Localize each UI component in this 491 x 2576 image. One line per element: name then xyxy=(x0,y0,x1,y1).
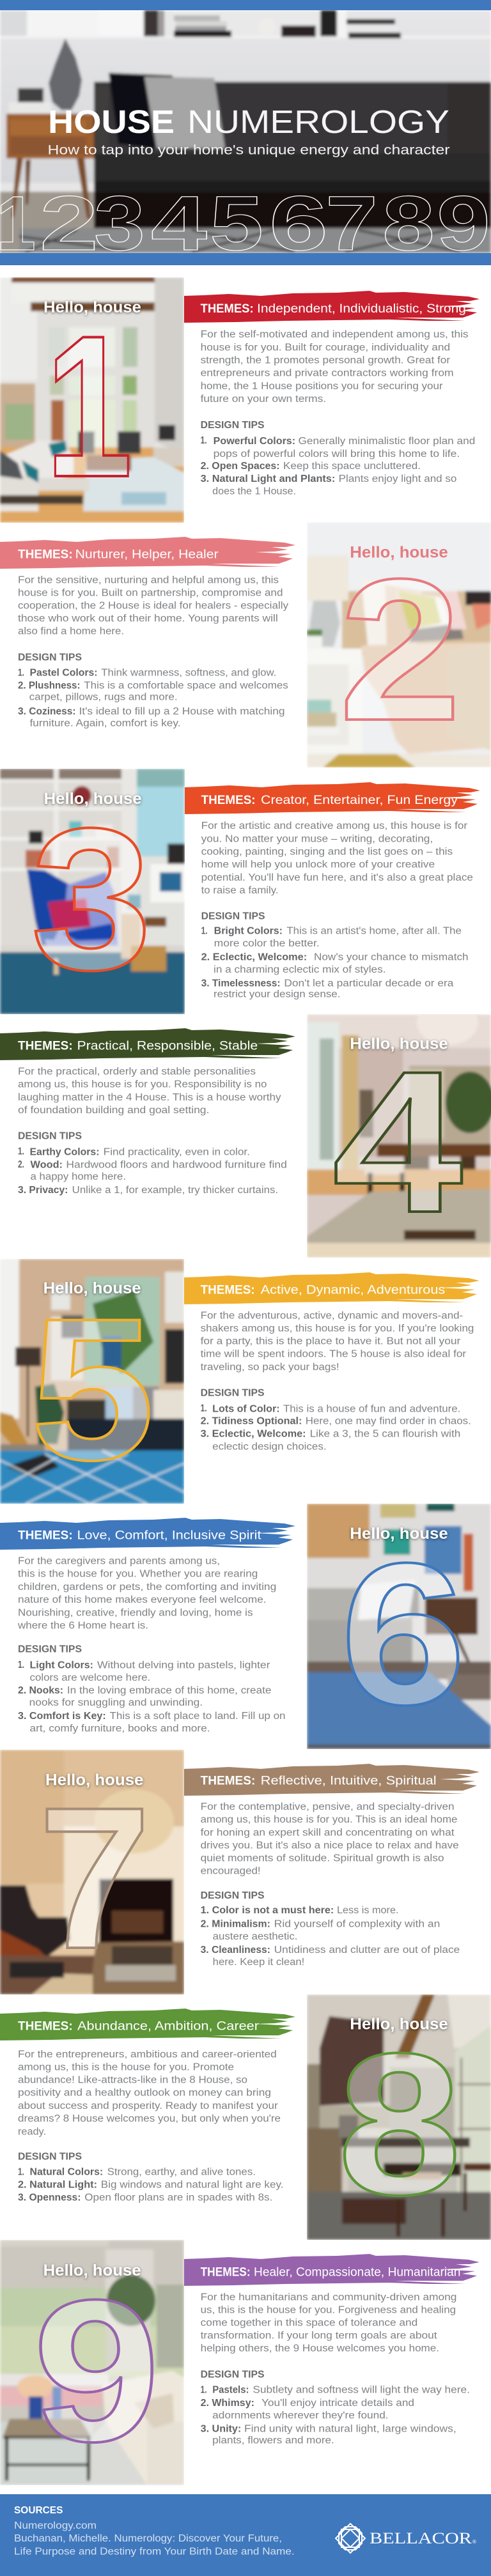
hello heading: Hello, house xyxy=(350,2015,448,2033)
sources text: Numerology.com xyxy=(14,2520,97,2531)
sources text: Life Purpose and Destiny from Your Birth Date and Name. xyxy=(14,2547,295,2557)
design tips: a happy home here. xyxy=(31,1171,126,1182)
design tips: Don't let a particular decade or era xyxy=(284,978,454,989)
design tips: Powerful Colors: xyxy=(214,436,295,447)
description text: you. No matter your muse – writing, decorating, xyxy=(201,833,433,844)
photo: pastel bedroom xyxy=(307,522,491,767)
themes banner: Reflective, Intuitive, Spiritual xyxy=(261,1775,437,1788)
hello heading: Hello, house xyxy=(44,790,142,808)
design tips: Find unity with natural light, large windows, xyxy=(244,2423,456,2434)
design tips: Generally minimalistic floor plan and xyxy=(298,436,475,447)
themes banner xyxy=(0,537,295,569)
themes banner: Nurturer, Helper, Healer xyxy=(75,548,219,561)
themes banner: THEMES: xyxy=(201,302,254,316)
description text: traveling, so pack your bags! xyxy=(201,1362,339,1373)
themes banner xyxy=(184,2254,479,2286)
design tips xyxy=(201,1388,471,1452)
design tips: This is a house of fun and adventure. xyxy=(283,1403,460,1414)
design tips: This is a soft place to land. Fill up on xyxy=(110,1711,285,1722)
description text: where the 6 Home heart is. xyxy=(17,1620,148,1631)
design tips: 1. xyxy=(201,1403,207,1414)
design tips xyxy=(18,1644,285,1734)
photo: dining room xyxy=(307,1000,491,1258)
design tips: 2. Whimsy: xyxy=(201,2398,254,2409)
design tips: Without delving into pastels, lighter xyxy=(97,1660,270,1671)
photo: brick loft xyxy=(0,1259,184,1504)
panel: house 2 xyxy=(0,522,491,767)
description text xyxy=(201,1310,474,1373)
themes banner xyxy=(184,1764,479,1796)
hero outlined digits 1 to 9: 6 xyxy=(269,180,328,266)
design tips: 1. xyxy=(18,1660,24,1670)
themes banner: THEMES: xyxy=(18,1529,73,1543)
design tips: nooks for snuggling and unwinding. xyxy=(29,1697,203,1708)
themes banner xyxy=(0,1518,295,1550)
design tips: Plants enjoy light and so xyxy=(339,474,456,484)
design tips: 2. Natural Light: xyxy=(18,2180,97,2191)
themes banner xyxy=(0,2009,295,2040)
design tips: 2. Tidiness Optional: xyxy=(201,1416,302,1427)
themes banner xyxy=(184,1272,479,1304)
description text: cooking, painting, singing and the list goes on – this xyxy=(201,847,453,858)
design tips: 1. xyxy=(18,667,24,678)
description text: for a party, this is the place to have it. But not all your xyxy=(201,1336,460,1347)
design tips: 3. Eclectic, Welcome: xyxy=(201,1429,306,1440)
design tips: DESIGN TIPS xyxy=(201,420,265,431)
design tips: Bright Colors: xyxy=(214,926,283,937)
design tips: Less is more. xyxy=(337,1905,399,1916)
panel: house 9 xyxy=(0,2240,479,2485)
themes banner: THEMES: xyxy=(201,1775,255,1788)
description text: For the artistic and creative among us, this house is for xyxy=(201,821,467,831)
design tips: Rid yourself of complexity with an xyxy=(274,1919,440,1930)
description text: encouraged! xyxy=(201,1866,261,1877)
design tips: Unlike a 1, for example, try thicker curtains. xyxy=(72,1185,278,1196)
numeral 4: 4 xyxy=(332,1029,464,1254)
photo: fireplace room xyxy=(0,1750,184,1994)
design tips: Strong, earthy, and alive tones. xyxy=(107,2166,256,2177)
description text: those who work out of their home. Young parents will xyxy=(18,613,278,624)
hero outlined digits 1 to 9 xyxy=(0,180,490,266)
design tips: DESIGN TIPS xyxy=(18,2151,82,2162)
description text: about success and prosperity. Ready to manifest your xyxy=(18,2101,278,2111)
hero photo: living room xyxy=(0,10,491,253)
design tips: austere aesthetic. xyxy=(213,1931,298,1942)
design tips: Big windows and natural light are key. xyxy=(101,2180,284,2191)
design tips: Wood: xyxy=(31,1160,63,1171)
numeral 3: 3 xyxy=(31,786,152,1012)
design tips: Pastels: xyxy=(212,2385,249,2396)
design tips xyxy=(201,420,475,497)
design tips: colors are welcome here. xyxy=(29,1672,150,1683)
hero outlined digits 1 to 9: 5 xyxy=(210,180,263,266)
design tips: You'll enjoy intricate details and xyxy=(261,2398,414,2409)
blue band under hero xyxy=(0,253,491,265)
design tips: It's ideal to fill up a 2 House with matching xyxy=(79,706,284,717)
numeral 7: 7 xyxy=(38,1765,151,1991)
design tips: art, comfy furniture, books and more. xyxy=(29,1723,210,1734)
description text: this is the house for you. Whether you are rearing xyxy=(18,1569,258,1580)
themes banner: THEMES: xyxy=(201,794,256,807)
design tips: 3. Coziness: xyxy=(18,706,76,717)
design tips xyxy=(201,911,469,1000)
design tips: carpet, pillows, rugs and more. xyxy=(29,691,178,702)
description text: home will help you unlock more of your creative xyxy=(201,860,435,870)
Bellacor logo: ® xyxy=(472,2539,476,2545)
themes banner: Love, Comfort, Inclusive Spirit xyxy=(77,1529,261,1543)
numeral 1: 1 xyxy=(45,293,132,519)
design tips: Subtlety and softness will light the way here. xyxy=(253,2385,470,2396)
description text: to raise a family. xyxy=(201,885,279,896)
description text: house is for you. Built on partnership, compromise and xyxy=(18,587,283,598)
numeral 2: 2 xyxy=(339,537,462,762)
description text: Nourishing, creative, friendly and loving, home is xyxy=(18,1607,253,1618)
hello heading: Hello, house xyxy=(43,1279,141,1297)
description text: abundance! Like-attracts-like in the 8 House, so xyxy=(18,2075,247,2086)
photo: sunroom xyxy=(0,2240,184,2485)
themes banner: Independent, Individualistic, Strong xyxy=(257,302,466,316)
hero subtitle: How to tap into your home's unique energy and character xyxy=(47,143,450,157)
hero outlined digits 1 to 9: 4 xyxy=(151,180,207,266)
hero panel xyxy=(0,10,491,266)
hello heading: Hello, house xyxy=(43,298,141,316)
description text: of foundation building and goal setting. xyxy=(18,1105,209,1116)
description text xyxy=(201,1801,459,1877)
description text: future on your own terms. xyxy=(201,394,326,405)
panel: house 8 xyxy=(0,1994,491,2240)
hello heading: Hello, house xyxy=(350,1035,448,1053)
design tips: does the 1 House. xyxy=(212,486,296,497)
description text: children, gardens or pets, the comforting and inviting xyxy=(18,1582,276,1593)
description text: among us, this house is for you. This is an ideal home xyxy=(201,1814,457,1825)
design tips: Untidiness and clutter are out of place xyxy=(274,1945,460,1955)
design tips: Keep this space uncluttered. xyxy=(283,461,421,472)
design tips: In the loving embrace of this home, create xyxy=(67,1685,271,1696)
numeral 6: 6 xyxy=(340,1521,466,1747)
description text: transformation. If your long term goals are about xyxy=(201,2330,437,2341)
description text: helping others, the 9 House welcomes you home. xyxy=(201,2343,439,2354)
design tips: 1. xyxy=(201,2385,207,2396)
sources text: SOURCES xyxy=(14,2505,63,2516)
design tips: Natural Colors: xyxy=(29,2166,103,2177)
hello heading: Hello, house xyxy=(350,544,448,562)
design tips: furniture. Again, comfort is key. xyxy=(29,718,180,729)
design tips: DESIGN TIPS xyxy=(18,652,82,663)
themes banner: THEMES: xyxy=(18,2020,73,2033)
design tips: 2. Plushness: xyxy=(18,681,81,691)
description text: For the contemplative, pensive, and specialty-driven xyxy=(201,1801,455,1812)
description text: house is for you. Built for courage, individuality and xyxy=(201,342,450,353)
design tips: Now's your chance to mismatch xyxy=(314,952,469,963)
numeral 5: 5 xyxy=(30,1276,155,1502)
hero title xyxy=(48,104,449,140)
design tips xyxy=(18,652,288,729)
design tips: Pastel Colors: xyxy=(29,667,97,678)
description text: dreams? 8 House welcomes you, but only when you're xyxy=(18,2113,281,2124)
numeral 8: 8 xyxy=(338,2011,462,2237)
description text: also find a home here. xyxy=(18,626,124,637)
description text xyxy=(201,2292,456,2354)
description text: nature of this home makes everyone feel welcome. xyxy=(18,1594,267,1605)
description text: For the humanitarians and community-driven among xyxy=(201,2292,456,2303)
hero outlined digits 1 to 9: 8 xyxy=(382,180,435,266)
design tips: 2. Open Spaces: xyxy=(201,461,280,472)
hero title: HOUSE xyxy=(48,104,175,140)
description text: among us, this house is for you. Responsibility is no xyxy=(18,1079,267,1090)
themes banner xyxy=(184,291,479,323)
description text: come together in this space of tolerance and xyxy=(201,2317,417,2329)
hero title: NUMEROLOGY xyxy=(187,104,449,140)
design tips: 1. xyxy=(18,2166,24,2177)
description text: For the adventurous, active, dynamic and movers-and- xyxy=(201,1310,463,1321)
design tips: 3. Openness: xyxy=(18,2193,81,2203)
themes banner xyxy=(185,782,480,814)
design tips: Open floor plans are in spades with 8s. xyxy=(84,2193,272,2203)
description text: for honing an expert skill and concentrating on what xyxy=(201,1827,455,1838)
description text xyxy=(18,2049,281,2137)
description text: time will be spent indoors. The 5 house is also ideal for xyxy=(201,1349,466,1360)
themes banner: THEMES: xyxy=(201,1283,255,1297)
design tips: Lots of Color: xyxy=(212,1403,280,1414)
description text: shakers among us, this house is for you. If you're looking xyxy=(201,1323,474,1334)
design tips: 3. Comfort is Key: xyxy=(18,1711,106,1722)
design tips: DESIGN TIPS xyxy=(201,1388,265,1399)
design tips xyxy=(201,2370,470,2446)
themes banner: THEMES: xyxy=(18,1040,73,1053)
hero outlined digits 1 to 9: 7 xyxy=(325,180,378,266)
footer panel xyxy=(0,2494,491,2576)
design tips: plants, flowers and more. xyxy=(212,2435,334,2446)
design tips: 3. Unity: xyxy=(201,2423,241,2434)
design tips xyxy=(201,1890,460,1968)
design tips: pops of powerful colors will bring this home to life. xyxy=(214,449,460,459)
design tips: Find practicality, even in color. xyxy=(104,1146,250,1157)
themes banner: Practical, Responsible, Stable xyxy=(77,1040,258,1053)
themes banner: Creator, Entertainer, Fun Energy xyxy=(261,794,458,807)
design tips: in a charming eclectic mix of styles. xyxy=(214,964,386,975)
design tips: Light Colors: xyxy=(29,1660,93,1671)
Bellacor logo: BELLACOR xyxy=(370,2530,472,2547)
design tips: restrict your design sense. xyxy=(214,989,340,1000)
hero outlined digits 1 to 9: 3 xyxy=(94,180,145,266)
design tips: Think warmness, softness, and glow. xyxy=(101,667,276,678)
design tips: 2. Nooks: xyxy=(18,1685,63,1696)
design tips: here. Keep it clean! xyxy=(213,1957,304,1968)
panel: house 7 xyxy=(0,1750,479,1994)
design tips: 3. Natural Light and Plants: xyxy=(201,474,335,484)
photo: living room with blue rug xyxy=(307,1504,491,1749)
themes banner: THEMES: xyxy=(201,2266,251,2279)
description text xyxy=(201,329,469,405)
description text: home, the 1 House positions you for securing your xyxy=(201,381,443,392)
design tips: DESIGN TIPS xyxy=(201,2370,265,2380)
design tips: DESIGN TIPS xyxy=(201,1890,265,1901)
themes banner: Healer, Compassionate, Humanitarian xyxy=(254,2266,460,2279)
description text: laughing matter in the 4 House. This is a house worthy xyxy=(18,1092,281,1103)
themes banner: Abundance, Ambition, Career xyxy=(77,2020,260,2033)
design tips: eclectic design choices. xyxy=(212,1441,327,1452)
description text: us, this is the house for you. Forgiveness and healing xyxy=(201,2304,456,2316)
sources text xyxy=(14,2505,295,2557)
description text: positivity and a healthy outlook on money can bring xyxy=(18,2088,271,2099)
panel: house 4 xyxy=(0,1000,491,1258)
panel: house 6 xyxy=(0,1504,491,1749)
design tips: 1. xyxy=(201,926,208,937)
hero outlined digits 1 to 9: 9 xyxy=(437,180,490,266)
design tips: adornments wherever they're found. xyxy=(212,2410,389,2421)
photo: creative living room with blue chair xyxy=(0,769,185,1014)
design tips: 3. Privacy: xyxy=(18,1185,68,1196)
description text: For the practical, orderly and stable personalities xyxy=(18,1067,256,1077)
design tips: This is an artist's home, after all. The xyxy=(286,926,462,937)
panel: house 1 xyxy=(0,277,479,523)
design tips: 1. xyxy=(201,435,207,446)
hello heading: Hello, house xyxy=(350,1525,448,1543)
description text xyxy=(18,1067,281,1116)
hero outlined digits 1 to 9: 2 xyxy=(40,180,98,266)
Bellacor logo xyxy=(336,2524,476,2553)
description text xyxy=(201,821,473,896)
design tips: Earthy Colors: xyxy=(29,1146,100,1157)
description text: potential. You'll have fun here, and it's also a great place xyxy=(201,872,473,883)
design tips: 1. xyxy=(18,1146,24,1157)
description text xyxy=(17,1556,276,1631)
design tips: DESIGN TIPS xyxy=(18,1644,82,1654)
design tips xyxy=(18,1131,287,1196)
description text: among us, this is the house for you. Promote xyxy=(18,2062,234,2072)
description text: entrepreneurs and private contractors working from xyxy=(201,368,454,379)
design tips: Like a 3, the 5 can flourish with xyxy=(310,1429,460,1440)
design tips: 3. Timelessness: xyxy=(201,978,281,989)
hello heading: Hello, house xyxy=(45,1771,143,1789)
design tips: 2. Eclectic, Welcome: xyxy=(201,952,307,963)
design tips: Here, one may find order in chaos. xyxy=(306,1416,471,1427)
description text: For the entrepreneurs, ambitious and career-oriented xyxy=(18,2049,277,2060)
description text: ready. xyxy=(18,2126,46,2137)
sources text: Buchanan, Michelle. Numerology: Discover Your Future, xyxy=(14,2533,282,2544)
design tips: 3. Cleanliness: xyxy=(201,1945,270,1955)
design tips: more color the better. xyxy=(214,938,320,949)
design tips: 2. Minimalism: xyxy=(201,1919,270,1930)
numeral 9: 9 xyxy=(33,2258,160,2483)
design tips: 1. Color is not a must here: xyxy=(201,1905,334,1916)
photo: bright living room xyxy=(0,277,184,523)
photo: high ceiling kitchen xyxy=(307,1994,491,2240)
description text xyxy=(18,575,288,637)
description text: For the self-motivated and independent among us, this xyxy=(201,329,469,340)
themes banner: Active, Dynamic, Adventurous xyxy=(261,1283,445,1297)
design tips: 2. xyxy=(18,1159,24,1170)
design tips: This is a comfortable space and welcomes xyxy=(84,681,288,691)
design tips xyxy=(18,2151,284,2203)
design tips: Hardwood floors and hardwood furniture find xyxy=(66,1160,287,1171)
description text: For the caregivers and parents among us, xyxy=(18,1556,220,1567)
top blue band xyxy=(0,0,491,10)
description text: cooperation, the 2 House is ideal for healers - especially xyxy=(18,600,288,611)
description text: quiet moments of solitude. Spiritual growth is also xyxy=(201,1853,444,1863)
description text: drives you. But it's also a nice place to relax and have xyxy=(201,1840,459,1851)
design tips: DESIGN TIPS xyxy=(18,1131,82,1142)
themes banner xyxy=(0,1028,295,1060)
panel: house 3 xyxy=(0,769,480,1014)
description text: strength, the 1 promotes personal growth. Great for xyxy=(201,355,450,366)
description text: For the sensitive, nurturing and helpful among us, this xyxy=(18,575,279,585)
themes banner: THEMES: xyxy=(18,548,73,561)
design tips: DESIGN TIPS xyxy=(201,911,265,922)
panel: house 5 xyxy=(0,1259,479,1504)
hello heading: Hello, house xyxy=(43,2262,141,2279)
